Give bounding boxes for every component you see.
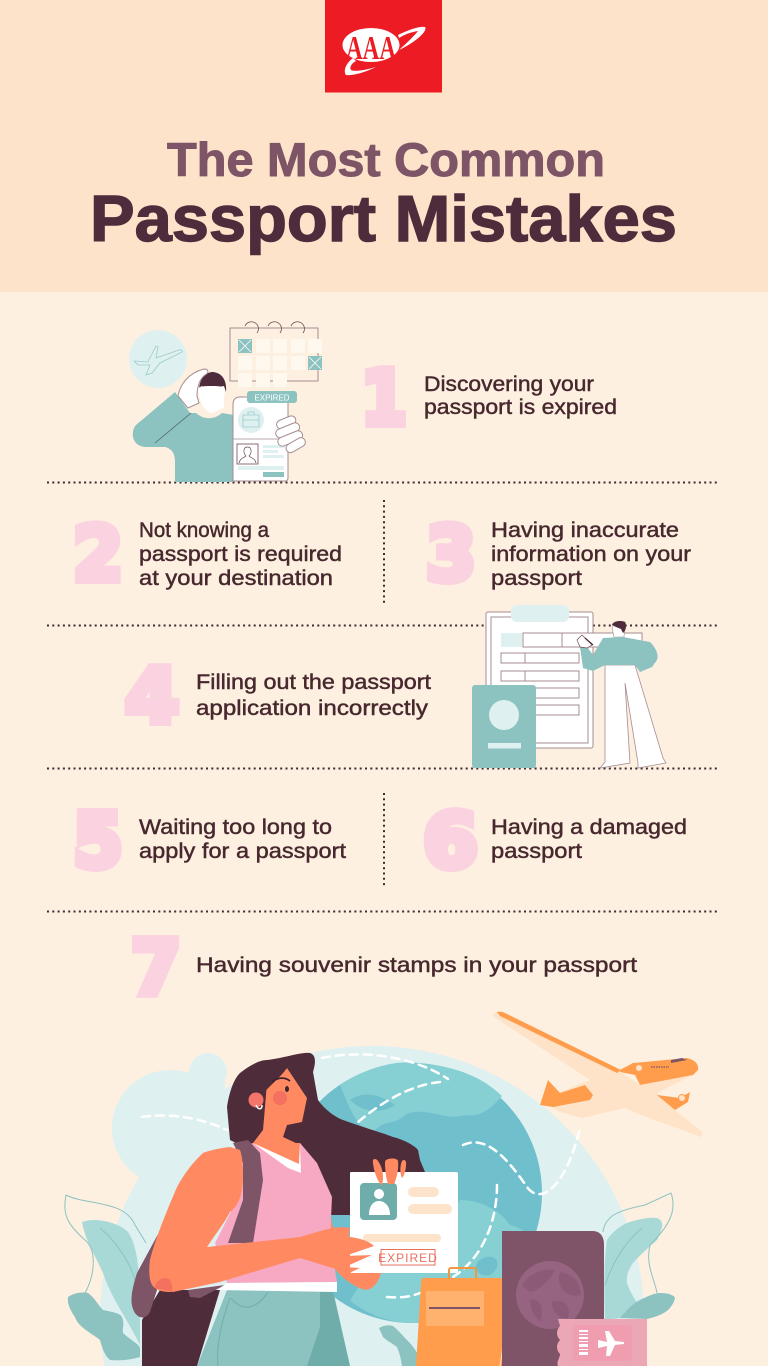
- logo: AAA: [325, 0, 442, 92]
- item 2: [73, 510, 342, 598]
- calendar: [230, 322, 322, 387]
- illustration: person filling application: [472, 605, 666, 768]
- strap: [228, 1140, 263, 1243]
- passport teal: [472, 685, 536, 768]
- title: Passport Mistakes: [90, 182, 677, 255]
- number 4: 4: [125, 652, 179, 740]
- text: item 4: [196, 671, 431, 720]
- text: item 5: apply for a passport: [139, 840, 346, 863]
- number 2: 2: [73, 510, 123, 598]
- far arm: [300, 1145, 381, 1290]
- item 3: [426, 510, 691, 598]
- text: item 6: [491, 816, 687, 863]
- plane: [494, 1012, 703, 1137]
- hand with fingers: [274, 415, 307, 454]
- item 7: [131, 924, 637, 1012]
- document: expired: [345, 1158, 458, 1275]
- illustration: traveller with globe: [65, 1012, 703, 1366]
- fingers: [345, 1158, 406, 1275]
- item 5: [73, 797, 346, 885]
- number 6: 6: [423, 797, 478, 885]
- text: item 3: information on your: [491, 543, 691, 566]
- text: item 2: [139, 519, 342, 590]
- flight paths: [142, 1054, 580, 1297]
- passport purple: [502, 1231, 604, 1366]
- text: item 2: at your destination: [139, 567, 333, 590]
- item 4: [125, 652, 431, 740]
- text: item 4: Filling out the passport: [196, 671, 431, 694]
- man: [133, 369, 234, 482]
- application board: [486, 605, 642, 748]
- item 1: [361, 354, 617, 442]
- text: item 7: Having souvenir stamps in your passport: [196, 954, 637, 977]
- title: [90, 133, 677, 255]
- hem: [217, 1282, 337, 1292]
- text: item 2: passport is required: [139, 543, 342, 566]
- near arm: [149, 1147, 372, 1292]
- text: item 1: [424, 373, 617, 419]
- expired document: [233, 391, 297, 481]
- globe: [282, 1062, 542, 1323]
- number 7: 7: [131, 924, 181, 1012]
- backpack: [131, 1225, 163, 1317]
- item 6: [423, 797, 687, 885]
- text: item 4: application incorrectly: [196, 697, 429, 720]
- left leaves: [65, 1195, 146, 1360]
- header band: [0, 0, 768, 292]
- text: item 5: Waiting too long to: [139, 816, 332, 839]
- illustration: man with expired passport: [129, 322, 322, 482]
- number 3: 3: [426, 510, 476, 598]
- background blobs: [100, 1046, 644, 1366]
- pants: [197, 1290, 350, 1366]
- neck and face: [253, 1068, 307, 1172]
- icon: plane circle: [129, 330, 187, 388]
- text: item 3: passport: [491, 567, 582, 590]
- title: The Most Common: [167, 133, 605, 186]
- number 1: 1: [361, 354, 407, 442]
- text: item 2: Not knowing a: [139, 519, 269, 542]
- ticket: [557, 1319, 647, 1366]
- text: item 6: Having a damaged: [491, 816, 687, 839]
- logo: AAA: AAA: [346, 30, 396, 67]
- text: item 1: Discovering your: [424, 373, 594, 396]
- expired document: EXPIRED: [254, 394, 290, 402]
- number 5: 5: [73, 797, 123, 885]
- person: [577, 621, 666, 768]
- text: item 5: [139, 816, 346, 863]
- top: [215, 1143, 337, 1283]
- suitcase: [416, 1268, 512, 1366]
- text: item 3: [491, 519, 691, 590]
- woman: [131, 1053, 425, 1366]
- text: item 6: passport: [491, 840, 582, 863]
- right leaves: [379, 1193, 675, 1366]
- stamp: expired: EXPIRED: [378, 1251, 438, 1265]
- hair: [227, 1053, 425, 1215]
- text: item 3: Having inaccurate: [491, 519, 679, 542]
- text: item 1: passport is expired: [424, 396, 617, 419]
